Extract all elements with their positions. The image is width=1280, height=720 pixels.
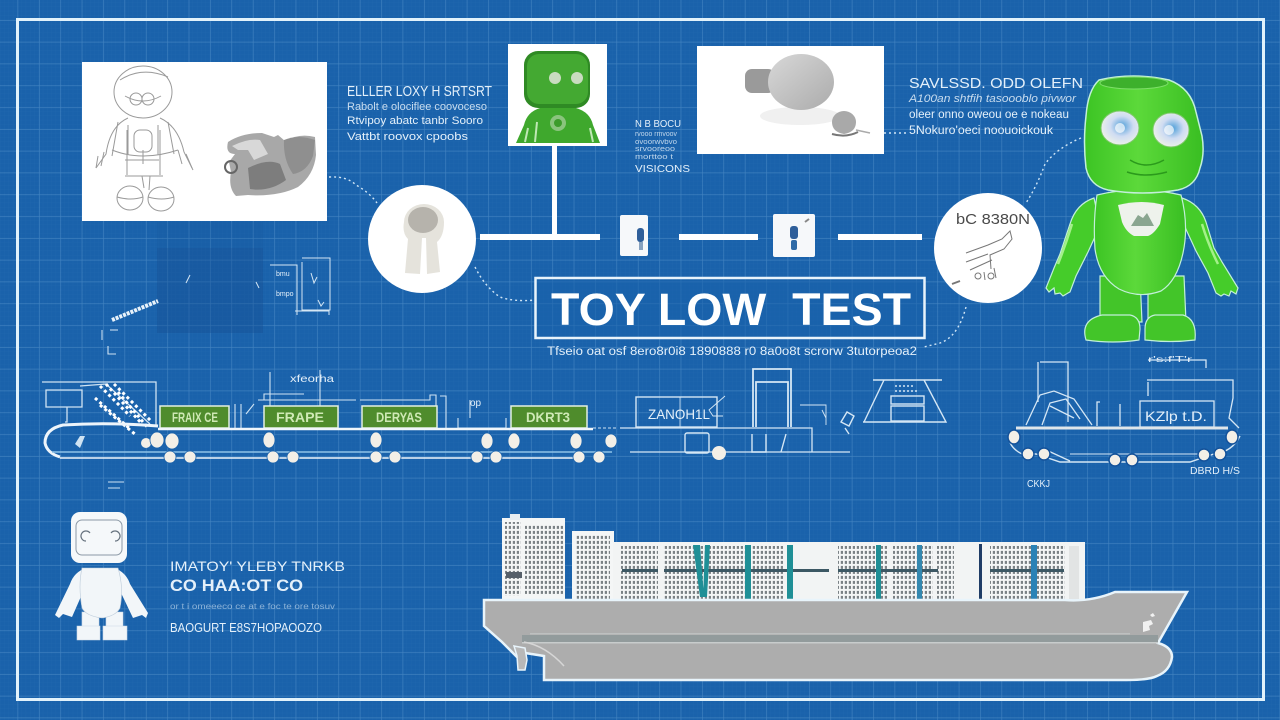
base line xyxy=(620,428,850,452)
robot head cap xyxy=(1100,77,1168,89)
text block: centre notes: srvooreoo xyxy=(635,146,675,153)
container teal columns xyxy=(693,544,1037,600)
right rollers xyxy=(1008,430,1238,466)
icon: clip part xyxy=(404,204,444,274)
hull stripe xyxy=(522,633,1158,644)
right conveyor line: CKKJ xyxy=(1027,479,1050,490)
text block: upper left notes: Rabolt e olociflee coovoceso xyxy=(347,101,487,113)
labelled box: ZANOH1L xyxy=(648,406,710,422)
icon: grey mechanical part xyxy=(225,133,316,196)
middle line schematics xyxy=(620,369,946,460)
icon: toy pencil sketch xyxy=(96,66,193,211)
robot mouth xyxy=(1127,160,1167,175)
upper conveyor frames: op xyxy=(470,398,482,409)
stage label boxes xyxy=(160,406,587,428)
small schematic sketches: bmpo xyxy=(276,291,294,298)
end icon xyxy=(75,436,85,448)
title box: TOY LOW TEST xyxy=(551,284,911,335)
circle: left toy part xyxy=(368,185,476,293)
circle: right sketch xyxy=(934,193,1042,303)
right machine sketches xyxy=(1026,355,1239,428)
left machine sketch xyxy=(42,382,156,448)
subtitle line: Tfseio oat osf 8ero8r0i8 1890888 r0 8a0o8t scrorw 3tutorpeoa2 xyxy=(547,346,917,358)
robot legs and feet xyxy=(1085,276,1195,342)
ship bridge tower xyxy=(502,514,565,602)
belt lines xyxy=(1016,426,1228,430)
anchor marks xyxy=(1143,613,1155,632)
text block: upper right notes: SAVLSSD. ODD OLEFN xyxy=(909,75,1083,92)
ship rudder xyxy=(514,646,527,670)
labelled box xyxy=(1140,401,1214,427)
left conveyor line xyxy=(42,346,617,488)
panel: sketch of toy and grey part xyxy=(82,62,327,221)
icon: card one xyxy=(620,215,648,256)
text block: upper right notes: 5Nokuro'oeci noouoickouk xyxy=(909,125,1053,137)
labelled box xyxy=(636,397,717,427)
hopper trapezoid xyxy=(863,380,946,422)
text block: upper right notes xyxy=(908,75,1083,137)
ship container stacks xyxy=(613,542,1085,604)
belt rollers xyxy=(150,432,617,463)
icon: bulb part xyxy=(745,54,870,136)
robot head xyxy=(1084,76,1203,193)
small robot head xyxy=(71,512,127,563)
text block: upper left notes: Vattbt roovox cpoobs xyxy=(347,131,469,143)
robot chest badge xyxy=(1118,202,1164,236)
small robot legs xyxy=(77,612,127,640)
tall gate frame xyxy=(753,369,791,427)
text block: upper right notes: A100an shtfih tasoooblo pivwor xyxy=(908,93,1077,105)
darker background panel xyxy=(157,222,263,333)
diagonal bar xyxy=(112,301,158,320)
line captions: DBRD H/S xyxy=(1190,466,1240,477)
text block: centre notes: N B BOCU xyxy=(635,119,681,130)
connector bars and small cards xyxy=(480,214,922,257)
small white robot xyxy=(55,512,148,640)
robot torso xyxy=(1094,190,1186,295)
connector: portrait stem xyxy=(552,146,557,236)
text block: centre notes: VISICONS xyxy=(635,163,690,175)
panel: grey bulb part xyxy=(697,46,884,154)
belts xyxy=(45,424,617,458)
icon: machine sketch xyxy=(952,231,1012,284)
text block: centre notes: ovoorwvbvo xyxy=(635,139,677,146)
upper conveyor frames xyxy=(108,346,506,488)
text block: lower left notes: BAOGURT E8S7HOPAOOZO xyxy=(170,620,322,635)
text block: centre notes: rvooo rmvoov xyxy=(635,131,677,138)
dotted connectors xyxy=(329,133,1081,347)
right conveyor line xyxy=(1008,355,1240,490)
small robot arms xyxy=(55,568,148,618)
text block: upper right notes: oleer onno oweou oe e nokeau xyxy=(909,109,1069,121)
stage label boxes: FRAPE xyxy=(276,409,324,425)
robot eyes xyxy=(1101,111,1189,147)
icon: green toy xyxy=(516,51,600,143)
upper conveyor frames: xfeorha xyxy=(290,374,335,385)
text block: lower left notes xyxy=(170,558,345,635)
text block: lower left notes: IMATOY' YLEBY TNRKB xyxy=(170,558,345,574)
ship second tower xyxy=(572,531,614,603)
labelled box: KZlp t.D. xyxy=(1145,408,1207,424)
container ship xyxy=(484,514,1187,680)
panel: green toy portrait xyxy=(508,44,607,146)
text block: upper left notes xyxy=(347,83,492,143)
ship hull xyxy=(484,592,1187,680)
text block: upper left notes: ELLLER LOXY H SRTSRT xyxy=(347,83,492,100)
text block: lower left notes: CO HAA:OT CO xyxy=(170,576,303,595)
circle: right sketch: bC 8380N xyxy=(956,211,1030,228)
lower box and roller xyxy=(685,433,786,460)
small marks xyxy=(709,396,826,425)
small schematic sketches xyxy=(102,258,330,340)
robot arms xyxy=(1046,198,1238,296)
stage label boxes: FRAIX CE xyxy=(172,409,218,425)
text block: lower left notes: or t i omeeeco ce at e foc te ore tosuv xyxy=(170,602,335,611)
text block: upper left notes: Rtvipoy abatc tanbr Sooro xyxy=(347,115,483,127)
big green toy robot xyxy=(1046,76,1238,342)
stern curve xyxy=(524,642,564,666)
small schematic sketches: bmu xyxy=(276,271,290,278)
stage label boxes: DKRT3 xyxy=(526,409,570,425)
right machine sketches: r's:f'T'r xyxy=(1148,355,1193,364)
small robot torso xyxy=(80,568,122,618)
stage label boxes: DERYAS xyxy=(376,409,422,425)
text block: centre notes: morttoo t xyxy=(635,154,673,161)
text block: centre notes xyxy=(635,119,690,175)
icon: card two xyxy=(773,214,815,257)
